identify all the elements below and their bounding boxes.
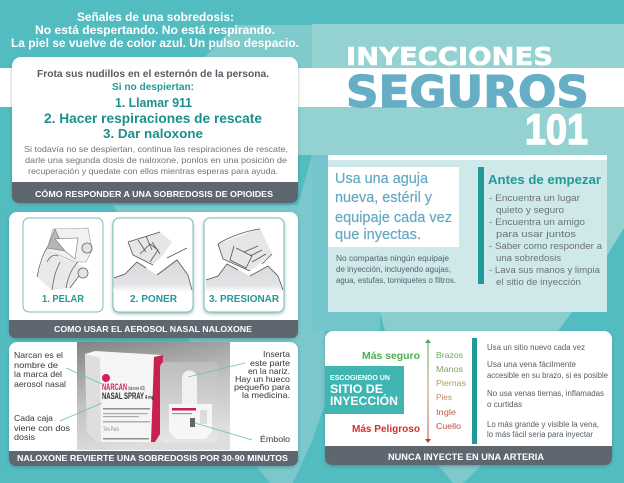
tag: choosing a site — [325, 366, 404, 414]
instruction text — [24, 69, 288, 176]
panel: naloxone product — [9, 342, 298, 466]
tag: choosing a site: SITIO DE — [330, 382, 383, 396]
callouts left: nombre de — [14, 360, 58, 370]
checklist: before starting: una sobredosis — [496, 253, 562, 263]
card: step 3 press — [204, 218, 284, 312]
panel: how to respond to an overdose — [12, 57, 298, 203]
list: body sites: Ingle — [436, 407, 456, 417]
list: body sites: Cuello — [436, 421, 461, 431]
title: SEGUROS — [346, 67, 589, 118]
callouts right — [234, 349, 290, 444]
checklist: before starting: para usar juntos — [496, 229, 577, 239]
checklist: before starting — [488, 173, 602, 287]
text: site tips: o curtidas — [487, 400, 522, 409]
footer bar — [325, 446, 612, 465]
text: do not share: de inyección, incluyendo agujas, — [336, 265, 451, 274]
leader lines — [60, 363, 252, 440]
footer bar — [12, 182, 298, 203]
label: safer: Más seguro — [362, 350, 420, 362]
checklist: before starting: quieto y seguro — [496, 205, 564, 215]
list: body sites: Pies — [436, 392, 452, 402]
footer bar: CÓMO RESPONDER A UNA SOBREDOSIS DE OPIOIDES — [35, 188, 273, 199]
callouts left: viene con dos — [14, 423, 70, 433]
photo: nasal spray box and device: NARCAN — [102, 382, 127, 392]
callouts left: Cada caja — [14, 413, 53, 423]
callouts right: Inserta — [263, 349, 290, 359]
text: site tips: Usa una vena fácilmente — [487, 360, 577, 369]
card: step 2 place — [113, 218, 193, 312]
text: site tips: Usa un sitio nuevo cada vez — [487, 343, 585, 352]
callouts left — [14, 350, 70, 442]
accent bar — [478, 167, 484, 284]
text: site tips: Lo más grande y visible la vena, — [487, 420, 599, 429]
photo: nasal spray box and device: NASAL SPRAY — [102, 391, 144, 402]
card: step 2 place: 2. PONER — [130, 293, 177, 305]
tag: choosing a site: ESCOGIENDO UN — [330, 375, 390, 382]
footer bar — [9, 320, 298, 338]
checklist: before starting: el sitio de inyección — [496, 277, 581, 287]
instruction text: 1. Llamar 911 — [115, 96, 192, 110]
list: body sites — [436, 350, 466, 431]
title: INYECCIONES — [346, 42, 553, 71]
callout: new needle — [328, 167, 459, 247]
photo: nasal spray box and device: 4 mg — [145, 395, 154, 401]
panel: safe injection intro — [328, 155, 607, 312]
instruction text: 2. Hacer respiraciones de rescate — [44, 111, 262, 126]
title — [346, 42, 589, 154]
footer bar — [9, 451, 298, 466]
heading: overdose signs: Señales de una sobredosis: — [77, 10, 234, 24]
callouts right: pequeño para — [234, 382, 290, 392]
card: step 1 peel — [23, 218, 103, 312]
accent bar — [472, 338, 477, 444]
text: site tips: accesible en su brazo, si es posible — [487, 371, 609, 380]
callouts right: la medicina. — [242, 390, 290, 400]
panel: how to use nasal spray — [9, 212, 298, 338]
footer bar: NUNCA INYECTE EN UNA ARTERIA — [388, 452, 544, 463]
callouts right: Hay un hueco — [235, 374, 290, 384]
callouts left: la marca del — [14, 369, 62, 379]
list: body sites: Brazos — [436, 350, 463, 360]
instruction text: darle una segunda dosis de naloxone, ponlos en una posición de — [25, 155, 287, 165]
text: do not share: agua, estufas, torniquetes o filtros. — [336, 276, 456, 285]
tag: choosing a site: INYECCIÓN — [330, 393, 398, 408]
instruction text: 3. Dar naloxone — [103, 127, 203, 141]
callouts right: Émbolo — [260, 434, 290, 444]
instruction text: recuperación y quedate con ellos mientras esperas para ayuda. — [28, 166, 278, 176]
callout: new needle: que inyectas. — [335, 226, 421, 243]
text: site tips — [487, 343, 609, 439]
title: 101 — [525, 106, 588, 154]
instruction text: Frota sus nudillos en el esternón de la persona. — [37, 69, 269, 80]
photo: nasal spray box and device: Two Pack — [103, 426, 119, 433]
checklist: before starting: - Saber como responder a — [489, 241, 602, 251]
callouts left: dosis — [14, 432, 35, 442]
callouts left: aerosol nasal — [14, 379, 66, 389]
callouts left: Narcan es el — [14, 350, 63, 360]
panel: choosing an injection site — [325, 331, 612, 465]
text: site tips: lo más fácil seria para inyectar — [487, 430, 593, 439]
footer bar: NALOXONE REVIERTE UNA SOBREDOSIS POR 30-90 MINUTOS — [17, 453, 288, 463]
callouts right: este parte — [250, 358, 290, 368]
checklist: before starting: - Lava sus manos y limpia — [489, 265, 600, 275]
list: body sites: Manos — [436, 364, 463, 374]
list: body sites: Piernas — [436, 378, 466, 388]
card: step 3 press: 3. PRESIONAR — [209, 294, 280, 305]
footer bar: COMO USAR EL AEROSOL NASAL NALOXONE — [54, 324, 252, 334]
heading: overdose signs: La piel se vuelve de color azul. Un pulso despacio. — [11, 36, 299, 50]
instruction text: Si todavía no se despiertan, continua las respiraciones de rescate, — [24, 144, 288, 154]
callout: new needle: equipaje cada vez — [335, 209, 452, 226]
arrow: safety scale — [425, 339, 431, 443]
callout: new needle: Usa una aguja — [335, 170, 429, 187]
heading: overdose signs: No está despertando. No está respirando. — [35, 23, 275, 37]
checklist: before starting: - Encuentra un lugar — [489, 193, 580, 203]
card: step 1 peel: 1. PELAR — [42, 293, 84, 305]
text: do not share: No compartas ningún equipaje — [336, 254, 450, 263]
callout: new needle: nueva, estéril y — [335, 189, 432, 206]
photo: nasal spray box and device — [77, 342, 230, 450]
label: more dangerous: Más Peligroso — [352, 423, 420, 435]
callouts right: en la nariz. — [248, 366, 290, 376]
heading: overdose signs — [11, 10, 299, 50]
photo: nasal spray box and device: (naloxone HCl) — [128, 386, 145, 392]
text: do not share — [336, 254, 456, 285]
text: site tips: No usa venas tiernas, inflamadas — [487, 389, 604, 398]
checklist: before starting: - Encuentra un amigo — [489, 217, 585, 227]
instruction text: Si no despiertan: — [112, 82, 194, 93]
checklist: before starting: Antes de empezar — [488, 173, 601, 187]
